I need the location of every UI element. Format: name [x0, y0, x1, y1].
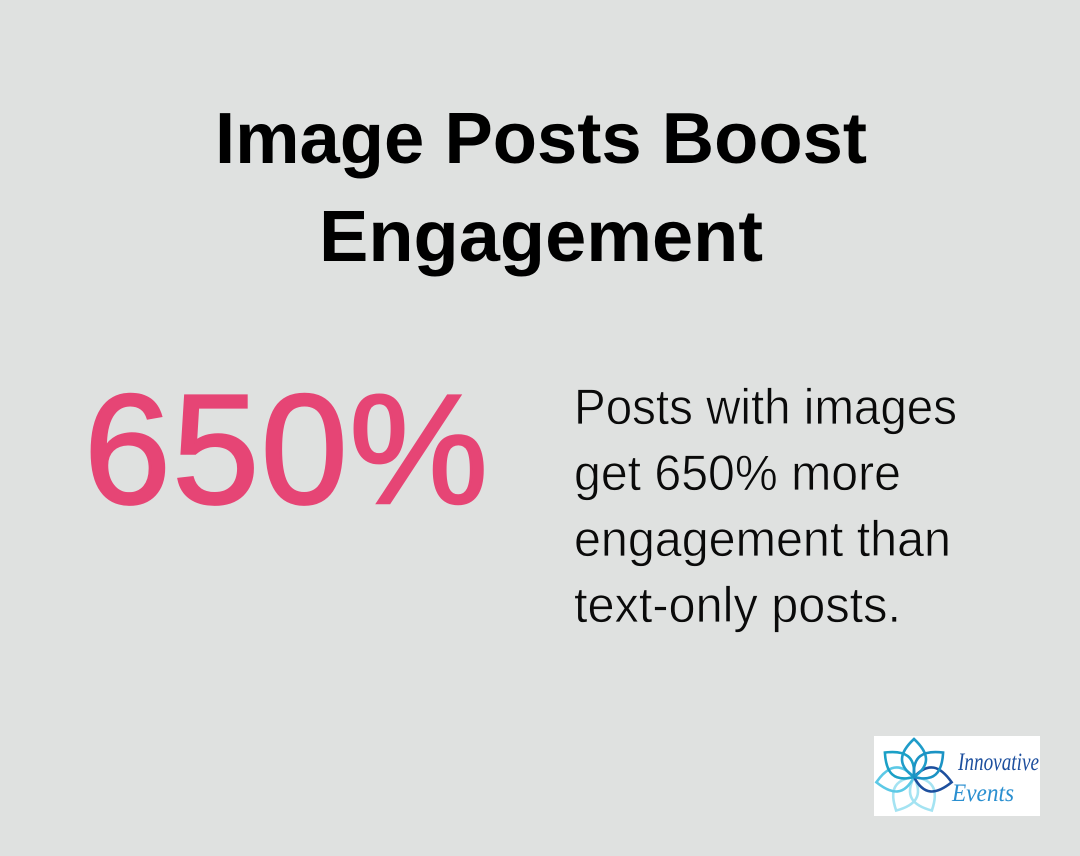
- title: Image Posts Boost: [215, 99, 867, 179]
- big stat: 650%: 650%: [84, 363, 488, 537]
- title: Engagement: [319, 197, 763, 277]
- logo: Innovative Events: [874, 736, 1040, 816]
- stat description: engagement than: [574, 511, 951, 567]
- stat description: [574, 379, 957, 633]
- logo wordmark: [951, 749, 1039, 807]
- logo wordmark: Innovative: [957, 749, 1039, 776]
- stat description: get 650% more: [574, 445, 901, 501]
- logo wordmark: Events: [951, 780, 1014, 807]
- icon: lotus flower: [875, 739, 953, 816]
- title: [215, 99, 867, 277]
- stat description: Posts with images: [574, 379, 957, 435]
- stat description: text-only posts.: [574, 577, 901, 633]
